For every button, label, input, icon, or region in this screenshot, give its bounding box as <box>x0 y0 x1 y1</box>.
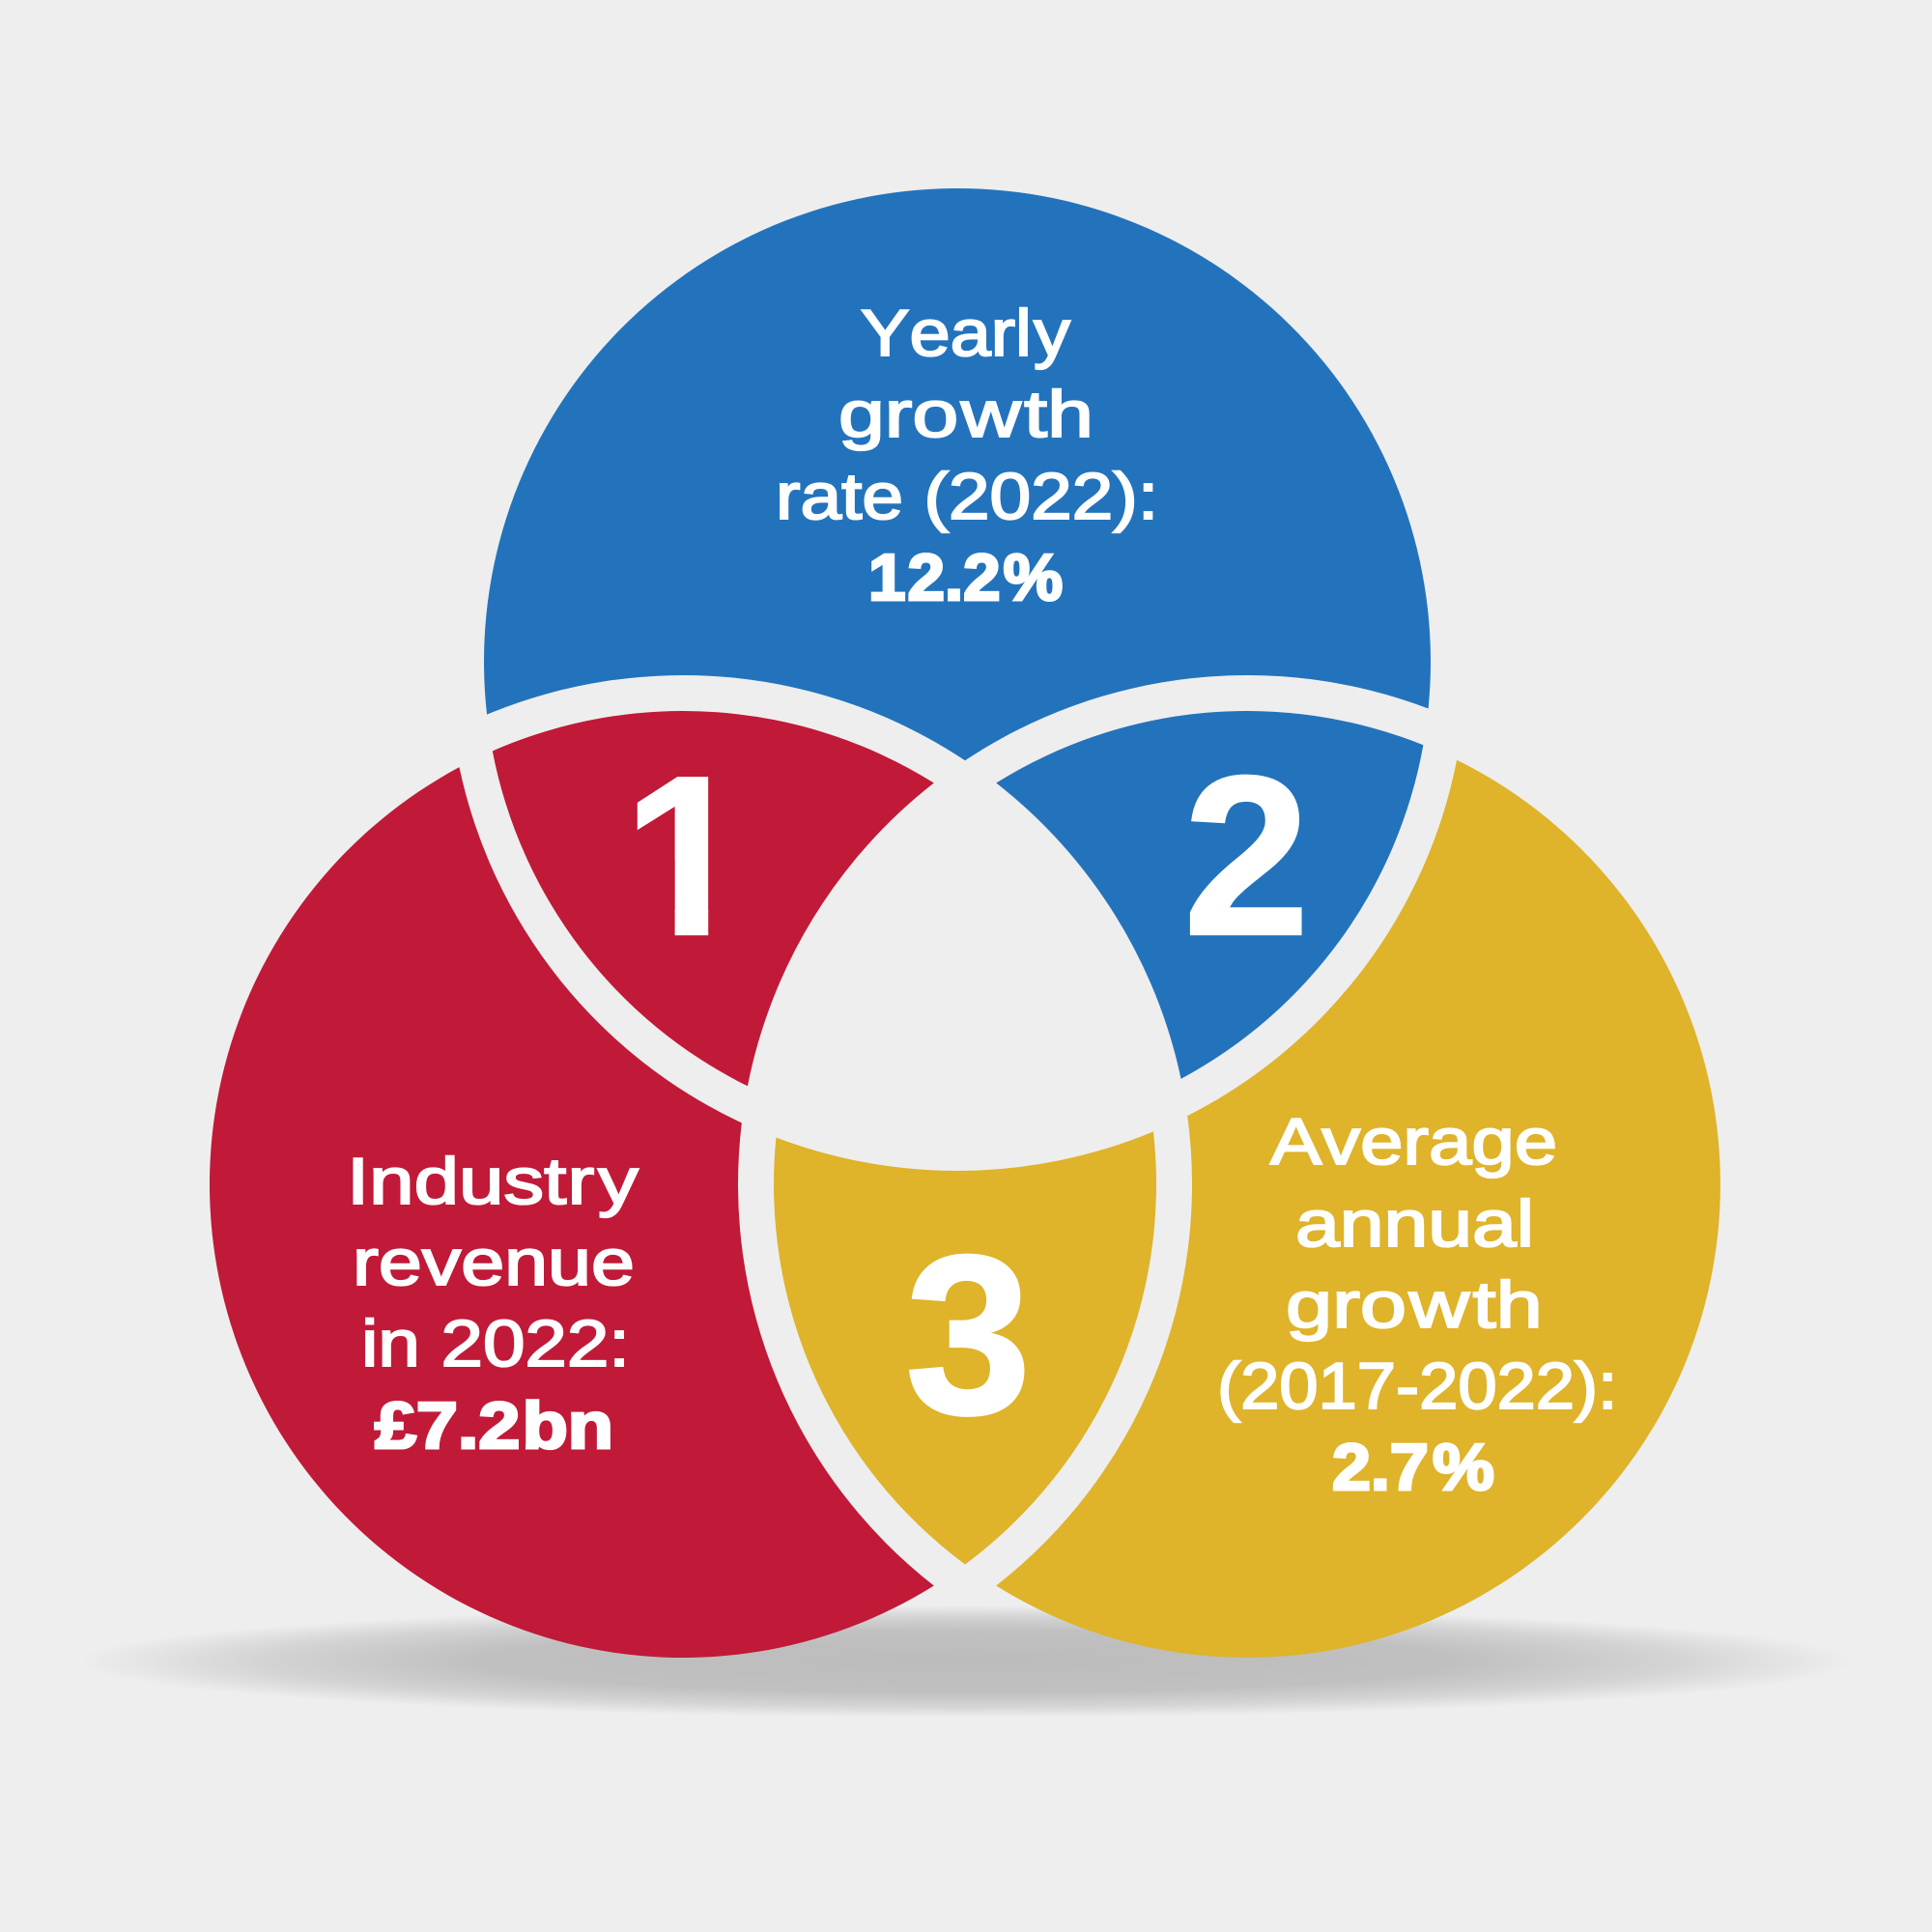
panel: average annual growth (gold circle): growth <box>1286 1268 1543 1342</box>
overlap segment 3: 3 <box>905 1208 1032 1462</box>
overlap segment 1: 1 <box>623 728 750 982</box>
panel: industry revenue (red circle): in 2022: <box>361 1307 630 1380</box>
panel: yearly growth rate (blue circle): growth <box>838 378 1094 451</box>
overlap segment 1 <box>493 711 934 1086</box>
panel: average annual growth (gold circle): 2.7% <box>1332 1431 1494 1504</box>
panel: average annual growth (gold circle): annual <box>1295 1187 1534 1261</box>
panel: industry revenue (red circle): revenue <box>353 1226 635 1299</box>
panel: industry revenue (red circle): Industry <box>347 1145 639 1218</box>
overlap segment 2: 2 <box>1183 728 1310 982</box>
panel: yearly growth rate (blue circle): Yearly <box>861 297 1070 370</box>
panel: average annual growth (gold circle): (2017-2022): <box>1217 1350 1617 1423</box>
panel: industry revenue (red circle) <box>210 767 934 1658</box>
ground shadow <box>77 1605 1855 1718</box>
overlap segment 3 <box>774 1131 1156 1564</box>
panel: industry revenue (red circle): £7.2bn <box>375 1389 613 1463</box>
panel: yearly growth rate (blue circle): 12.2% <box>868 541 1063 614</box>
panel: yearly growth rate (blue circle): rate (2022): <box>776 460 1158 533</box>
panel: average annual growth (gold circle) <box>996 760 1720 1658</box>
overlap segment 2 <box>996 711 1423 1079</box>
panel: yearly growth rate (blue circle) <box>484 188 1431 760</box>
panel: average annual growth (gold circle): Average <box>1270 1105 1557 1179</box>
